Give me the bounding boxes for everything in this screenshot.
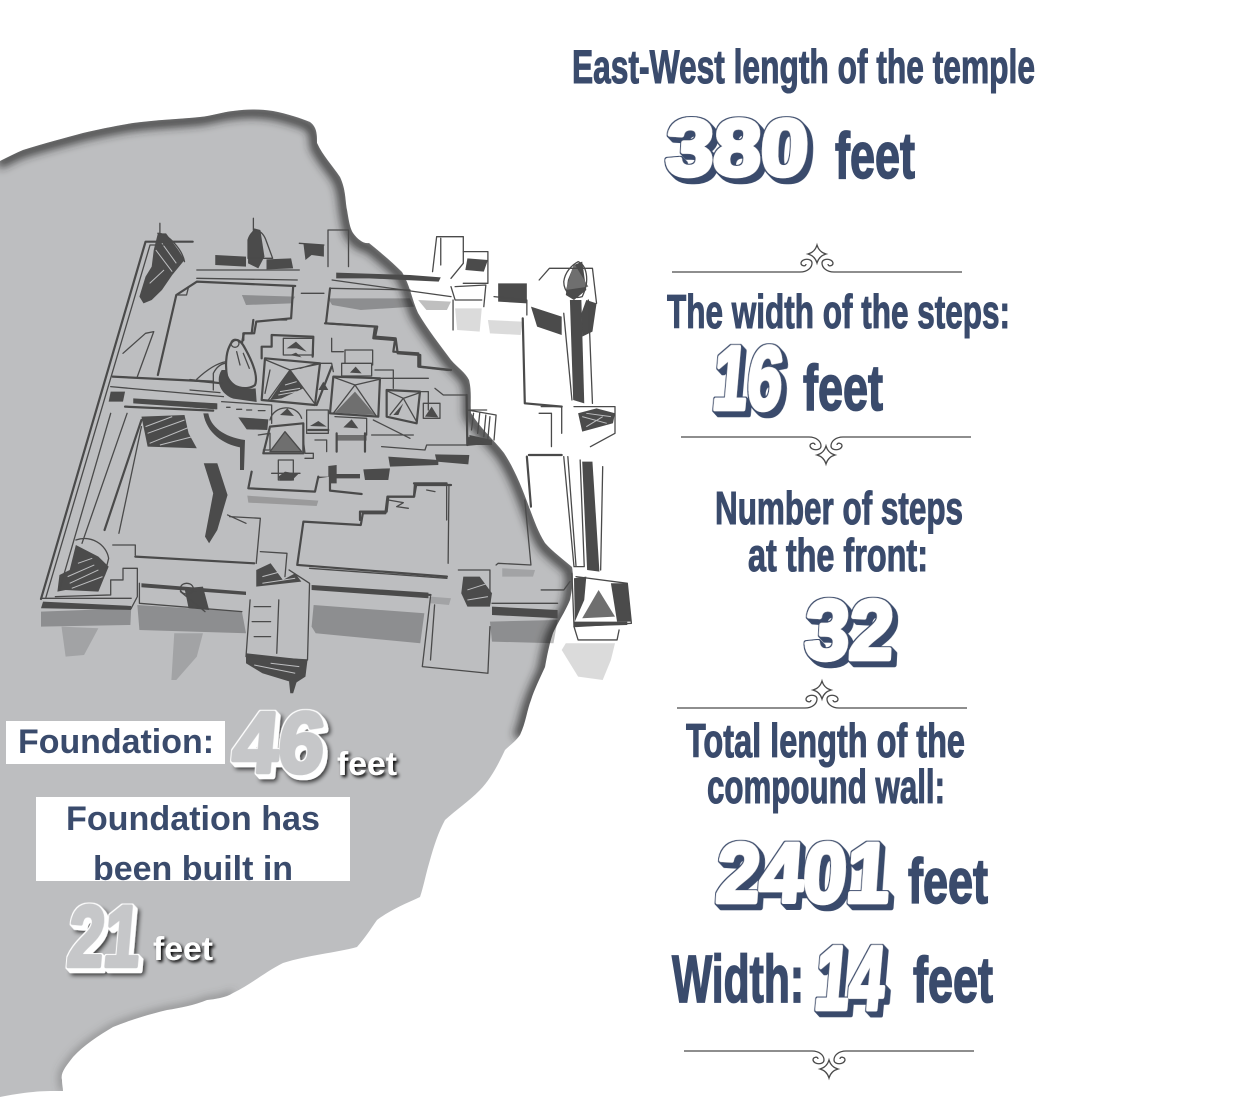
label line one: Foundation has — [66, 800, 320, 838]
label: Width: — [672, 942, 804, 1017]
shrine gray faces — [247, 392, 375, 506]
unit: feet — [153, 930, 213, 967]
shrine ink masses — [190, 342, 487, 483]
gray torn-paper panel — [0, 110, 573, 1097]
line one: Number of steps — [715, 482, 963, 534]
dark inked masses — [41, 228, 631, 693]
unit: feet — [913, 944, 993, 1016]
heading: width of the steps: The width of the steps: — [667, 285, 1010, 338]
divider ornament — [672, 245, 962, 272]
line two: compound wall: — [707, 760, 945, 813]
number 21: 21 — [64, 889, 145, 985]
label background — [36, 797, 350, 881]
ground shadows — [41, 295, 558, 643]
divider ornament — [684, 1051, 974, 1078]
number 380: 380 — [664, 103, 811, 192]
number 2401: 2401 — [714, 826, 893, 920]
number 14: 14 — [811, 928, 889, 1029]
light floor patches — [62, 308, 615, 680]
central shrine complex — [190, 320, 487, 520]
scribble highlights on ink — [68, 243, 611, 673]
temple illustration — [41, 218, 631, 693]
unit: feet — [803, 352, 883, 424]
unit: feet — [908, 847, 988, 917]
label line two: been built in — [93, 850, 293, 888]
stat: 16 feet — [709, 328, 883, 429]
heading: east-west length: East-West length of the temple — [572, 40, 1035, 93]
gray tower faces — [566, 263, 615, 618]
divider ornament — [677, 681, 967, 708]
number 46: 46 — [229, 695, 329, 791]
heading: compound wall — [686, 714, 965, 813]
walls and terraces — [41, 218, 631, 673]
foundation built-in label — [36, 797, 350, 888]
stat: 380 feet — [664, 103, 915, 192]
label background — [6, 721, 225, 764]
label text: Foundation: — [18, 723, 214, 761]
divider ornament — [681, 437, 971, 464]
unit: feet — [835, 119, 915, 192]
stat: 32: 32 — [803, 583, 896, 677]
shrine hatching — [278, 382, 300, 395]
shrine line work — [190, 320, 487, 520]
stat: width 14 feet — [672, 928, 993, 1029]
foundation built-in value — [64, 889, 213, 985]
line two: at the front: — [748, 529, 928, 581]
heading: number of steps — [715, 482, 963, 581]
foundation height label — [6, 721, 225, 764]
stat: 2401 feet — [714, 826, 988, 920]
line one: Total length of the — [686, 714, 965, 767]
foundation height value — [229, 695, 397, 791]
temple outer walls and towers — [41, 218, 631, 693]
unit: feet — [337, 745, 397, 782]
number 16: 16 — [709, 328, 787, 429]
